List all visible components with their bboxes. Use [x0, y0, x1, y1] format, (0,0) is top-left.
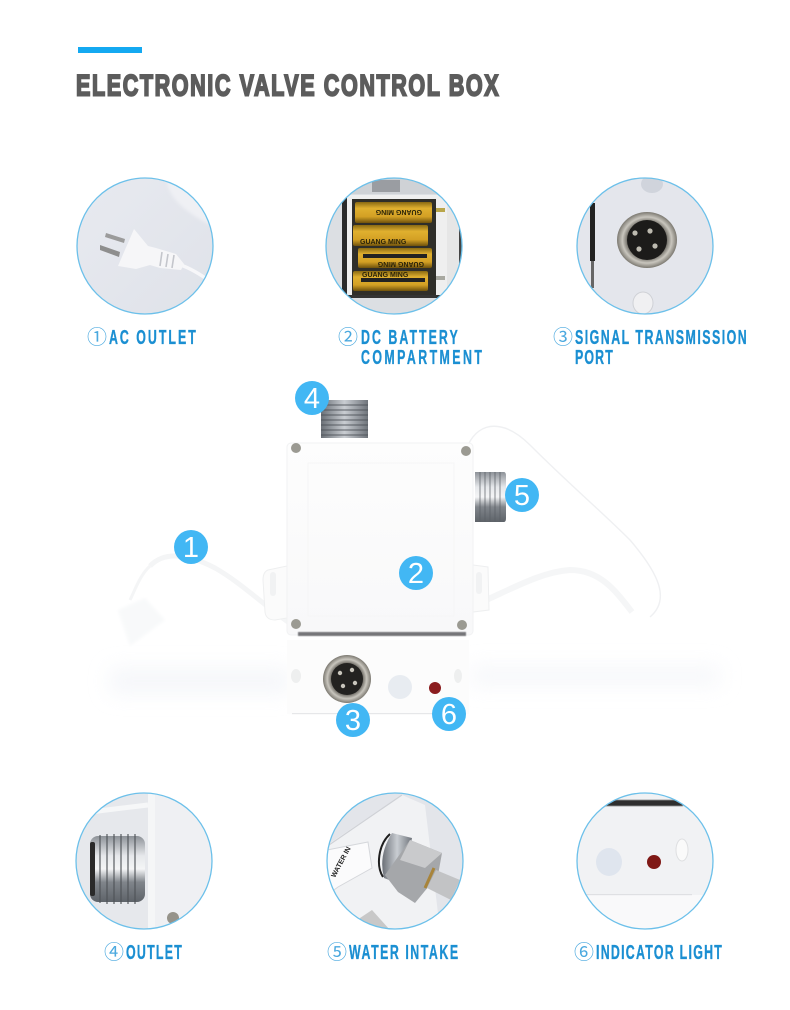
photo: outlet fitting — [76, 793, 212, 930]
badge 6 — [432, 697, 466, 731]
label: signal transmission port: ③ — [553, 326, 573, 349]
label: DC battery compartment: DC BATTERY — [361, 326, 458, 349]
photo: AC plug — [77, 178, 216, 314]
title: ELECTRONIC VALVE CONTROL BOX — [76, 68, 499, 102]
accent bar — [78, 47, 142, 53]
label: DC battery compartment: ② — [338, 326, 358, 349]
badge 1: 1 — [183, 532, 199, 564]
label: AC outlet: AC OUTLET — [109, 326, 196, 349]
photo: water intake: WATER IN — [331, 846, 353, 879]
label: DC battery compartment: COMPARTMENT — [361, 346, 482, 369]
plug on cable — [118, 598, 165, 646]
infographic canvas — [75, 47, 746, 961]
label: water intake: WATER INTAKE — [349, 941, 458, 964]
badge 3: 3 — [345, 705, 361, 737]
label: signal transmission port: SIGNAL TRANSMISSION — [575, 326, 747, 349]
badge 5: 5 — [514, 480, 530, 512]
label: signal transmission port — [553, 326, 747, 369]
badge 4 — [295, 381, 329, 415]
label: outlet: OUTLET — [126, 941, 182, 964]
product: top outlet fitting — [321, 400, 368, 438]
product: upper control box — [287, 443, 473, 636]
badge 6: 6 — [441, 699, 457, 731]
label: indicator light: INDICATOR LIGHT — [596, 941, 722, 964]
photo: battery compartment: GUANG MING — [360, 239, 407, 246]
label: AC outlet: ① — [87, 326, 107, 349]
photo: water intake — [327, 793, 463, 930]
badge 1 — [174, 530, 208, 564]
cables — [130, 426, 660, 622]
photo: indicator light — [577, 793, 717, 931]
product: lower sensor box — [287, 640, 469, 714]
product: mounting ears — [263, 565, 489, 620]
badge 4: 4 — [304, 383, 320, 415]
photo: battery compartment — [326, 178, 469, 314]
label: outlet: ④ — [104, 941, 124, 964]
photo: battery compartment: GUANG MING — [362, 272, 409, 279]
badge 2 — [399, 556, 433, 590]
photo: battery compartment: GUANG MING — [375, 208, 422, 215]
badge 5 — [505, 478, 539, 512]
floor shadow — [110, 666, 720, 694]
label: indicator light: ⑥ — [574, 941, 594, 964]
badge 3 — [336, 703, 370, 737]
product: side intake fitting — [475, 472, 506, 522]
photo: signal port — [577, 175, 713, 314]
label: DC battery compartment — [338, 326, 482, 369]
label: signal transmission port: PORT — [575, 346, 613, 369]
badge 2: 2 — [408, 558, 424, 590]
label: water intake: ⑤ — [327, 941, 347, 964]
photo: battery compartment: GUANG MING — [377, 260, 424, 267]
